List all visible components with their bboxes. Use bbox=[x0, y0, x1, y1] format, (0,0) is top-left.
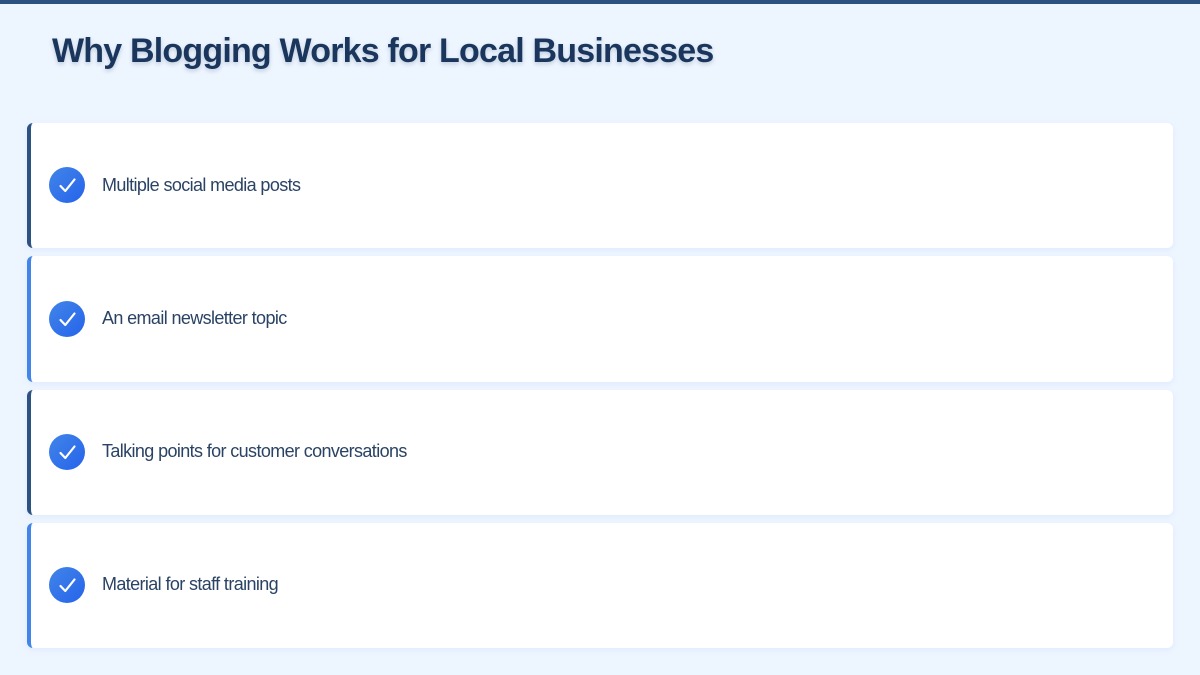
panel: talking points bbox=[27, 390, 1173, 515]
icon: check bbox=[49, 567, 85, 603]
icon: check bbox=[49, 434, 85, 470]
title: Why Blogging Works for Local Businesses bbox=[52, 32, 714, 70]
icon: check bbox=[49, 167, 85, 203]
panel: social media posts bbox=[27, 123, 1173, 248]
top accent bar bbox=[0, 0, 1200, 4]
panel: staff training bbox=[27, 523, 1173, 648]
icon: check bbox=[49, 301, 85, 337]
item text: Talking points for customer conversations bbox=[102, 441, 407, 461]
item text: An email newsletter topic bbox=[102, 308, 287, 328]
panel: email newsletter bbox=[27, 256, 1173, 382]
item text: Multiple social media posts bbox=[102, 175, 300, 195]
item text: Material for staff training bbox=[102, 574, 278, 594]
